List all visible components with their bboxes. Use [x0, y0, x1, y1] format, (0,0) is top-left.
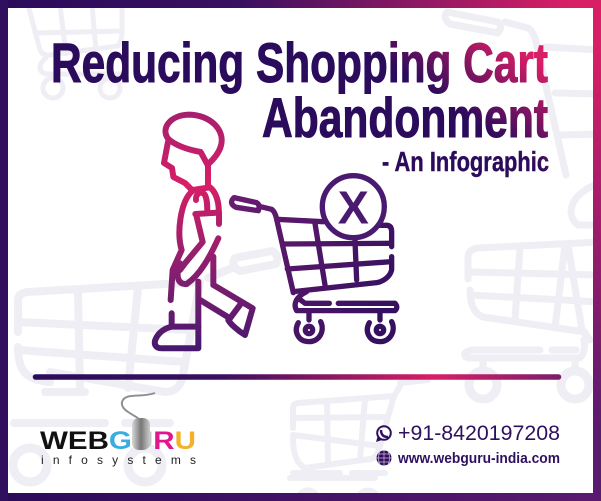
icon: globe	[376, 450, 392, 466]
cart: top right	[445, 12, 600, 225]
logo wordmark: WEB GURU	[40, 427, 196, 455]
title	[51, 31, 549, 177]
cart: right middle	[465, 242, 600, 399]
divider	[36, 374, 558, 380]
cart: big left	[13, 251, 277, 482]
icon: X circle: X	[338, 181, 369, 233]
person	[155, 115, 253, 348]
shopping cart	[232, 198, 397, 342]
cart: bottom center	[290, 380, 428, 498]
logo tagline: infosystems	[41, 453, 196, 467]
icon: whatsapp	[376, 426, 391, 442]
illustration: person pushing cart	[155, 115, 397, 348]
icon: X circle	[322, 176, 384, 238]
contact details	[376, 422, 560, 467]
logo: Webguru	[40, 393, 196, 467]
title: - An Infographic	[382, 146, 549, 177]
website: www.webguru-india.com	[397, 451, 560, 467]
cart: top left	[28, 5, 122, 98]
icon: mouse	[122, 393, 155, 450]
phone number: +91-8420197208	[398, 422, 560, 445]
